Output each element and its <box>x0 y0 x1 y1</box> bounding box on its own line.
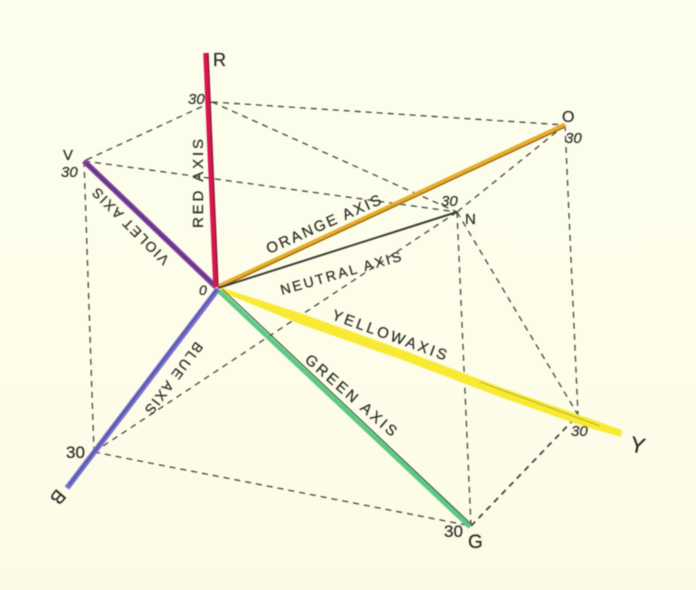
label: red axis: RED AXIS <box>190 139 207 228</box>
letter G: G <box>468 532 483 553</box>
axis: orange <box>218 125 565 288</box>
letter R: R <box>213 50 226 70</box>
label: neutral axis: NEUTRAL AXIS <box>278 248 403 298</box>
label: orange axis: ORANGE AXIS <box>264 192 384 258</box>
axis: green <box>219 289 472 527</box>
30 on neutral: 30 <box>441 193 458 210</box>
30 on red: 30 <box>188 91 205 108</box>
letter V: V <box>63 147 73 164</box>
axis: blue <box>67 289 218 488</box>
label: green axis: GREEN AXIS <box>301 351 400 440</box>
axis: red <box>206 53 218 287</box>
label: blue axis: BLUE AXIS <box>142 339 206 418</box>
30 on violet: 30 <box>61 164 78 181</box>
30 on blue: 30 <box>66 443 85 462</box>
axis: violet <box>84 161 216 287</box>
letter O at orange end: O <box>562 109 574 126</box>
30 on orange: 30 <box>565 130 582 147</box>
axis: neutral <box>218 212 457 288</box>
axis labels <box>89 139 449 440</box>
30 on yellow: 30 <box>571 423 588 440</box>
scale values 30 <box>61 91 588 541</box>
30 on green: 30 <box>444 522 463 541</box>
origin 0: 0 <box>199 282 207 298</box>
axis: yellow <box>222 288 622 437</box>
letter Y: Y <box>628 431 648 459</box>
letter N: N <box>465 211 476 228</box>
letter B: B <box>45 485 69 508</box>
endpoint letters <box>45 50 648 553</box>
label: yellow axis: YELLOWAXIS <box>330 307 449 364</box>
dashed cube edges <box>84 102 578 526</box>
label: violet axis: VIOLET AXIS <box>89 185 172 268</box>
